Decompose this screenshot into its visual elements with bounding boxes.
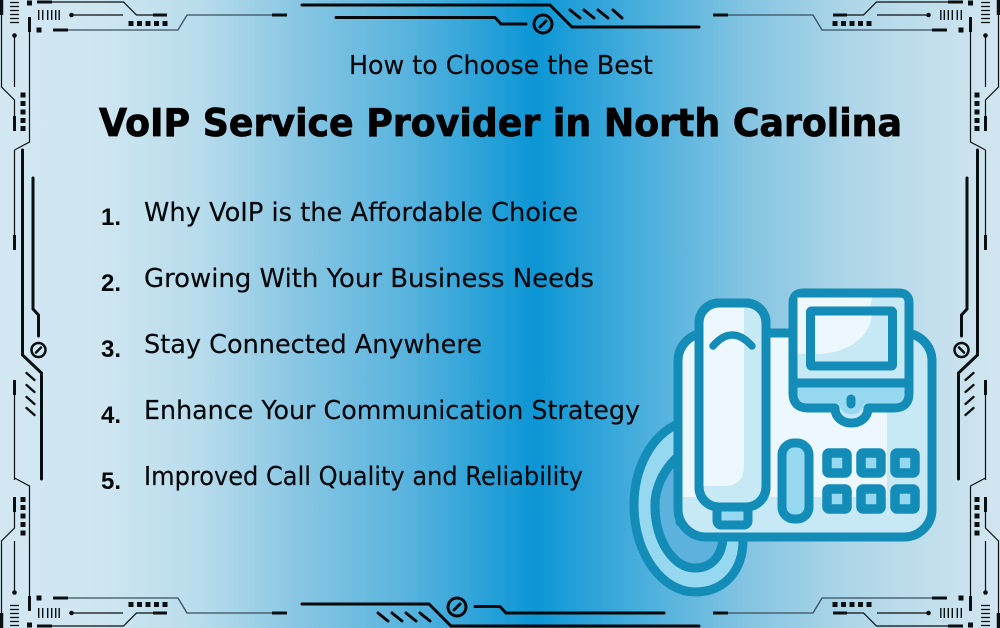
circuit frame: left side: [14, 150, 46, 480]
list item 4: 4.: [101, 402, 121, 429]
circuit frame: bottom-right corner: [713, 478, 998, 628]
circuit frame: bottom-left corner: [2, 478, 287, 628]
list item 1: 1.: [101, 204, 121, 231]
display unit: [793, 293, 909, 423]
circuit frame: top-right corner: [713, 0, 998, 150]
list item 5: Improved Call Quality and Reliability: [144, 462, 583, 492]
circuit frame: right side: [954, 150, 986, 480]
circuit frame: bottom centre: [302, 598, 699, 626]
list item 2: Growing With Your Business Needs: [144, 264, 594, 294]
icon: desk phone: [634, 293, 932, 592]
keypad buttons: [827, 453, 915, 509]
subtitle: How to Choose the Best: [349, 51, 653, 81]
list item 5: 5.: [101, 468, 121, 495]
handset: [699, 303, 766, 507]
list item 3: 3.: [101, 336, 121, 363]
list item 3: Stay Connected Anywhere: [144, 330, 482, 360]
list item 4: Enhance Your Communication Strategy: [144, 396, 640, 426]
phone base: [678, 333, 932, 537]
handset connector: [717, 505, 748, 525]
list item 2: 2.: [101, 270, 121, 297]
keypad handle: [782, 443, 809, 519]
circuit frame: top centre: [302, 5, 699, 33]
title: VoIP Service Provider in North Carolina: [99, 101, 902, 145]
phone cord: [634, 423, 743, 592]
list item 1: Why VoIP is the Affordable Choice: [144, 198, 578, 228]
circuit frame: top-left corner: [2, 0, 287, 150]
